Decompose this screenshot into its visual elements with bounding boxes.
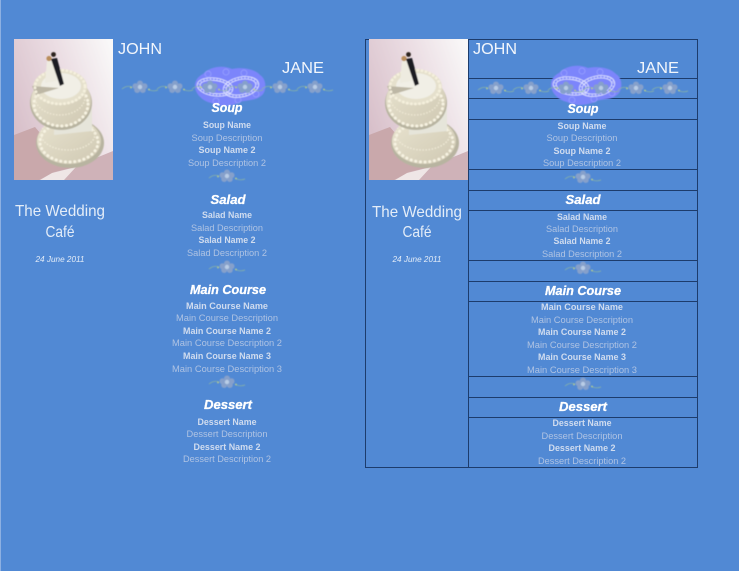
flower divider: [209, 376, 245, 388]
panel: menu preview without grid: [14, 39, 333, 465]
flower divider: [209, 170, 245, 182]
bride and groom names: JOHN: [473, 41, 517, 58]
section: main course: Main Course Name 3: [183, 351, 271, 362]
section: soup: Soup Description: [192, 133, 262, 144]
section: dessert: Dessert Description: [542, 431, 622, 442]
section: soup: Soup Description: [546, 133, 618, 144]
section: dessert: Dessert Description: [186, 429, 268, 440]
section: dessert: Dessert Description 2: [183, 454, 271, 465]
section: soup: Soup: [212, 100, 243, 115]
flower divider: [565, 262, 601, 274]
section: soup: Soup Name: [203, 120, 251, 131]
venue name: [372, 204, 462, 241]
date: 24 June 2011: [391, 255, 442, 264]
icon: wedding rings: [195, 67, 265, 106]
section: main course: Main Course: [545, 283, 621, 298]
bride and groom names: [473, 41, 679, 77]
section: dessert: [538, 399, 626, 467]
bride and groom names: JANE: [637, 60, 679, 77]
section: main course: Main Course Description 3: [172, 364, 282, 375]
section: soup: Soup Name: [558, 121, 606, 132]
section: main course: Main Course Description 2: [527, 340, 637, 351]
bride and groom names: JOHN: [118, 41, 162, 58]
section: main course: Main Course: [190, 282, 266, 297]
section: salad: Salad: [210, 192, 247, 207]
flower garland: [122, 80, 333, 93]
venue name: Café: [402, 224, 432, 241]
section: soup: Soup Name 2: [198, 145, 256, 156]
section: salad: Salad Name: [202, 210, 252, 221]
section: main course: Main Course Name 3: [538, 352, 626, 363]
section: dessert: Dessert Description 2: [538, 456, 626, 467]
section: salad: Salad Name 2: [198, 235, 256, 246]
section: dessert: Dessert: [559, 399, 608, 414]
photo: wedding cake: [369, 39, 468, 180]
flower divider: [565, 170, 601, 183]
section: salad: Salad Description: [546, 224, 618, 235]
section: main course: [527, 283, 637, 376]
section: main course: Main Course Description 2: [172, 338, 282, 349]
flower divider: [209, 260, 245, 273]
venue name: Café: [46, 224, 75, 241]
venue name: The Wedding: [15, 203, 105, 220]
section: dessert: Dessert Name 2: [548, 443, 616, 454]
section: soup: [543, 101, 621, 169]
section: salad: Salad Description: [191, 223, 263, 234]
section: salad: Salad Description 2: [187, 248, 267, 259]
section: dessert: [183, 397, 271, 465]
section: main course: Main Course Name: [541, 302, 623, 313]
section: soup: Soup Description 2: [188, 158, 266, 169]
section: salad: Salad Name: [557, 212, 607, 223]
section: soup: Soup Name 2: [554, 146, 610, 157]
bride and groom names: [118, 41, 324, 77]
flower divider: [565, 378, 601, 390]
date: 24 June 2011: [34, 255, 84, 264]
section: main course: Main Course Description: [531, 315, 633, 326]
section: main course: Main Course Description: [176, 313, 278, 324]
section: salad: Salad Description 2: [542, 249, 622, 260]
section: soup: Soup: [568, 101, 599, 116]
bride and groom names: JANE: [282, 60, 324, 77]
panel: menu preview with table grid: [366, 39, 698, 468]
section: dessert: Dessert: [204, 397, 253, 412]
section: main course: Main Course Name 2: [538, 327, 626, 338]
section: main course: Main Course Name 2: [183, 326, 271, 337]
section: soup: Soup Description 2: [543, 158, 621, 169]
photo: wedding cake: [14, 39, 113, 180]
flower garland: [478, 82, 688, 94]
section: main course: Main Course Name: [186, 301, 268, 312]
section: soup: [188, 100, 266, 169]
section: main course: [172, 282, 282, 375]
section: main course: Main Course Description 3: [527, 365, 637, 376]
section: salad: [187, 192, 267, 259]
section: dessert: Dessert Name 2: [194, 442, 260, 453]
venue name: [15, 203, 105, 241]
section: dessert: Dessert Name: [552, 418, 612, 429]
section: salad: Salad: [566, 192, 602, 207]
icon: wedding rings: [551, 66, 621, 105]
table grid lines: [366, 40, 698, 468]
section: dessert: Dessert Name: [198, 417, 256, 428]
section: salad: Salad Name 2: [554, 236, 610, 247]
venue name: The Wedding: [372, 204, 462, 221]
section: salad: [542, 192, 622, 260]
